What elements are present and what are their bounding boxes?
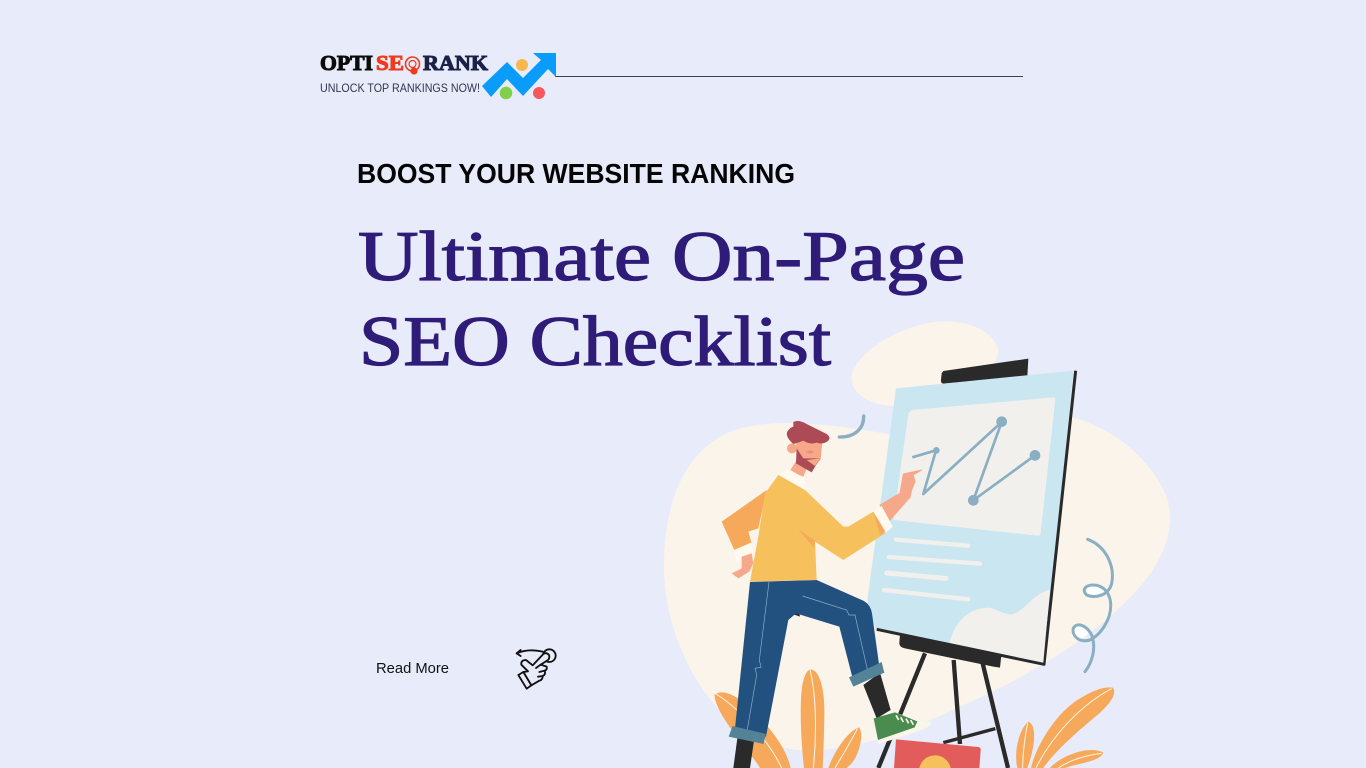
sweater shadows: [798, 512, 886, 548]
logo wordmark SEO: SE: [376, 51, 404, 75]
trouser cuff: right: [849, 662, 884, 687]
beard: [796, 448, 820, 472]
easel tray: [899, 634, 1001, 668]
logo wordmark SEO: [376, 51, 420, 75]
board wave: [949, 589, 1050, 663]
man: [722, 421, 932, 768]
board dark edge: [877, 371, 1076, 664]
trouser seams: [747, 582, 867, 729]
icon: swiping hand: [517, 649, 556, 689]
subtitle: BOOST YOUR WEBSITE RANKING: [357, 158, 795, 189]
illustration: man presenting at easel: [664, 321, 1170, 768]
back arm: [722, 490, 767, 552]
header divider line: [555, 76, 1023, 78]
squiggle right: [1073, 539, 1112, 672]
text lines on board: [884, 540, 980, 599]
background blob: large: [664, 415, 1170, 750]
red box: [894, 739, 981, 768]
logo tagline: UNLOCK TOP RANKINGS NOW!: [320, 81, 480, 95]
plant left: [714, 669, 861, 768]
face: [796, 438, 822, 470]
shoe: [874, 711, 932, 744]
line chart: [912, 416, 1040, 506]
lower legs: [733, 602, 891, 768]
easel legs: [878, 653, 1008, 768]
back cuff: [733, 543, 754, 562]
board clip: [941, 359, 1028, 384]
logo wordmark: OPTI: [320, 51, 373, 75]
yellow circle on box: [919, 755, 951, 768]
logo arrow: [482, 53, 556, 99]
front cuff: [873, 506, 893, 533]
title line 2: SEO Checklist: [359, 303, 831, 381]
background blob: small: [851, 321, 998, 406]
cheek: [806, 450, 814, 454]
board sheet: [867, 371, 1073, 664]
neck: [789, 460, 808, 477]
board: [867, 371, 1076, 664]
hair: [787, 421, 830, 444]
trouser cuff: left: [729, 726, 766, 744]
plant left veins: [716, 670, 857, 768]
logo wordmark RANK: RANK: [423, 51, 489, 75]
chart panel: [893, 397, 1055, 536]
ear: [787, 443, 797, 453]
collar: [779, 468, 805, 490]
title: [358, 218, 965, 381]
trousers: [735, 580, 879, 737]
sweater: [750, 475, 885, 582]
back hand: [732, 553, 753, 578]
accent curl near head: [839, 416, 864, 437]
logo: Opti SEO Rank: [320, 51, 556, 99]
front hand and forearm: [880, 470, 922, 520]
plant right: [1016, 687, 1114, 768]
mouth patch: [807, 458, 820, 466]
title line 1: Ultimate On-Page: [358, 218, 965, 296]
read more label: Read More: [376, 660, 449, 677]
